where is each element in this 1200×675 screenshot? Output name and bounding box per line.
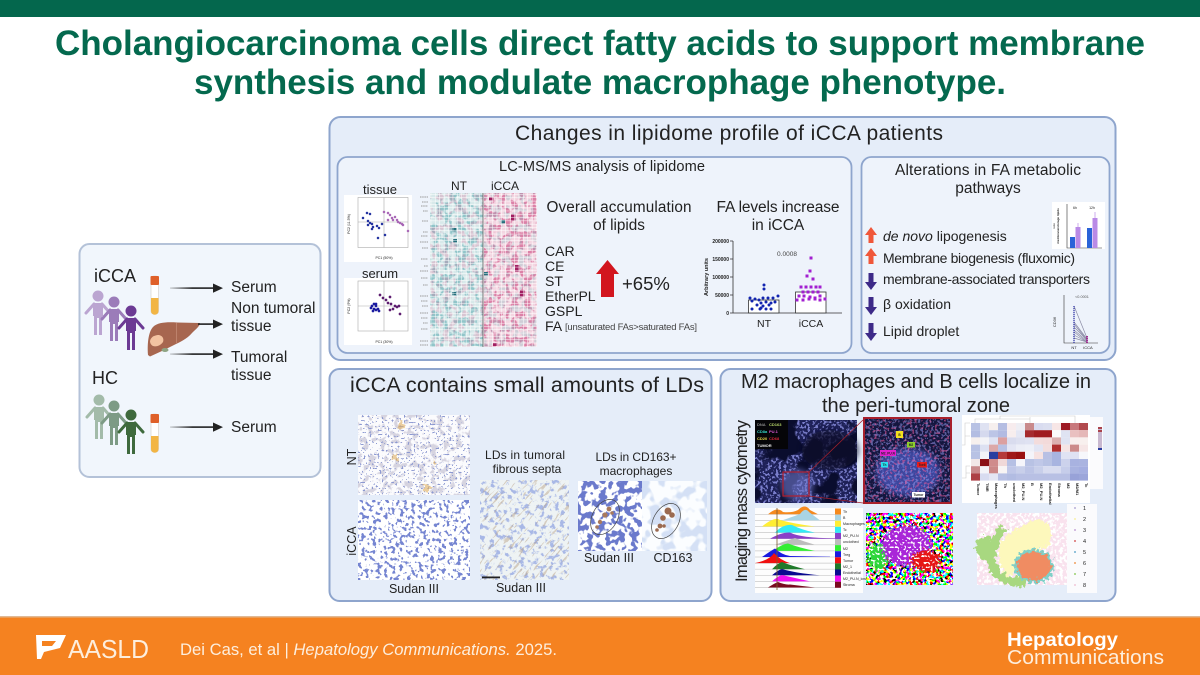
legend: ridge clusters: Tc	[843, 528, 847, 532]
text: HC serum: Serum	[231, 419, 277, 436]
cluster heatmap	[962, 415, 1103, 510]
mini bar chart: lipogenesis	[1052, 202, 1105, 249]
ridge plot	[755, 506, 866, 593]
caption: Sudan III macrophages: Sudan III	[584, 551, 634, 565]
mini bar chart: lipogenesis: 12h	[1089, 206, 1095, 210]
text: lipid droplet: Lipid droplet	[883, 323, 959, 339]
zoom box	[783, 472, 809, 496]
legend: IMC markers	[755, 420, 788, 449]
title	[55, 24, 1145, 102]
arrow: to serum	[170, 284, 223, 293]
legend: IMC markers: DNA	[757, 422, 766, 427]
cluster heatmap: Tc	[1084, 483, 1089, 488]
heading: Changes in lipidome profile of iCCA patients	[515, 122, 943, 145]
label: iCCA: iCCA	[345, 526, 359, 556]
legend: IMC markers: CD8a	[757, 429, 768, 434]
legend: ridge clusters: M2_PU.N_low	[843, 577, 866, 581]
legend: ridge clusters: B	[843, 516, 846, 520]
micrograph: fibrous septa	[480, 480, 569, 580]
caption: LDs in CD163+ macrophages: LDs in CD163+	[596, 450, 676, 464]
caption: Sudan III septa: Sudan III	[496, 581, 546, 595]
IMC image: zoomed region: Tcell	[918, 463, 926, 467]
legend: ridge clusters	[835, 508, 866, 588]
legend: ridge clusters: M2_PU.N	[843, 534, 859, 538]
IMC image: zoomed region: B	[898, 433, 901, 437]
legend: IMC markers: PU.1	[769, 429, 779, 434]
legend: neighbourhood numbers: 2	[1083, 517, 1086, 523]
legend: neighbourhood numbers: 4	[1083, 539, 1086, 545]
legend: neighbourhood numbers: 8	[1083, 583, 1086, 589]
legend: ridge clusters: M2_1	[843, 565, 852, 569]
legend: neighbourhood numbers: 1	[1083, 506, 1086, 512]
list: lipid classes: FA	[545, 318, 563, 334]
PCA plot: tissue: PC2 (11.5%)	[347, 214, 351, 234]
PCA plot: serum: PC1 (30%)	[375, 340, 393, 344]
lipid heatmap	[420, 179, 537, 347]
legend: ridge clusters: unclothed	[843, 540, 859, 544]
bar chart: FA levels: 0	[726, 311, 729, 317]
text: serum: Serum	[231, 279, 277, 296]
text: tumoral tissue: Tumoral	[231, 349, 287, 366]
text: tissue title: tissue	[363, 182, 397, 197]
legend: ridge clusters: Stroma	[843, 583, 855, 587]
cluster heatmap: B	[1030, 483, 1035, 486]
IMC image: zoomed region: M2	[909, 443, 913, 447]
caption: LDs in CD163+ macrophages	[596, 450, 676, 478]
text: beta oxidation: β oxidation	[883, 296, 951, 312]
HC label: HC	[92, 368, 118, 388]
micrograph: NT Sudan III	[358, 415, 470, 495]
legend: ridge clusters: Macrophages	[843, 522, 865, 526]
icon: iCCA patients	[86, 290, 143, 350]
panel: alterations in FA metabolic pathways	[862, 157, 1110, 353]
panel: changes in lipidome profile	[330, 117, 1116, 360]
panel: M2 macrophages and B cells	[720, 369, 1116, 601]
list: lipid classes: CAR	[545, 243, 575, 259]
top bar	[0, 0, 1200, 17]
mini slope chart: CD36: <0.0001	[1075, 295, 1089, 299]
text: tumoral tissue	[231, 349, 287, 384]
PCA plot: tissue	[344, 195, 412, 262]
panel: iCCA contains small amounts of LDs	[328, 368, 712, 602]
text: FA levels increase: in iCCA	[752, 217, 805, 234]
panel: patient cohorts and samples	[80, 244, 320, 477]
cluster heatmap: TMR	[985, 483, 990, 492]
list: lipid classes: ST	[545, 273, 563, 289]
text: +65%: +65%	[622, 273, 670, 294]
list: lipid classes: CE	[545, 258, 564, 274]
arrow: up de novo lipogenesis	[865, 227, 877, 243]
list: pathway changes	[865, 227, 1090, 341]
bar chart: FA levels: 150000	[712, 257, 729, 263]
IMC image: zoomed region: Th	[883, 463, 886, 467]
mini slope chart: CD36: NT	[1071, 345, 1077, 350]
footer bar	[0, 616, 1200, 675]
legend: IMC markers: CD20	[757, 436, 768, 441]
text: non tumoral tissue	[231, 300, 315, 335]
list: lipid classes: GSPL	[545, 303, 583, 319]
legend: ridge clusters: Th	[843, 510, 847, 514]
icon: iCCA blood tube	[150, 276, 159, 315]
cluster heatmap: M2_PU.N	[1039, 483, 1044, 500]
caption: LDs in tumoral fibrous septa: LDs in tumoral	[485, 448, 565, 462]
label: NT: NT	[345, 448, 359, 465]
heading: M2 macrophages and B cells localize in	[741, 371, 1091, 393]
text: de novo lipogenesis: de novo lipogenesis	[883, 228, 1007, 244]
text: serum title: serum	[362, 266, 398, 281]
logo: Hepatology Communications: Communications	[1007, 647, 1164, 669]
heading: LC-MS/MS analysis of lipidome	[499, 159, 705, 175]
legend: IMC markers: TUMOR	[757, 443, 772, 448]
legend: ridge clusters: Treg	[843, 553, 850, 557]
logo: Hepatology Communications	[1007, 630, 1164, 669]
citation: Dei Cas, et al | Hepatology Communications. 2025.	[180, 641, 557, 659]
heading: iCCA contains small amounts of LDs	[350, 373, 704, 397]
caption: CD163: CD163	[654, 551, 692, 565]
mini bar chart: lipogenesis: membrane/storage lipids	[1056, 208, 1060, 244]
legend: IMC markers: CD68	[769, 436, 780, 441]
legend: neighbourhood numbers: 6	[1083, 561, 1086, 567]
cluster heatmap: M2/M1	[1075, 483, 1080, 496]
arrow: HC to serum	[170, 422, 223, 432]
text: non tumoral tissue: tissue	[231, 318, 272, 335]
cluster heatmap: Endothelial	[1048, 483, 1053, 505]
bar chart: FA levels: 100000	[712, 275, 729, 281]
cluster heatmap: Macrophages	[994, 483, 999, 510]
icon: HC blood tube	[150, 414, 159, 453]
list: lipid classes	[545, 243, 697, 334]
arrow: red up	[596, 260, 619, 297]
logo: AASLD: AASLD	[68, 634, 149, 664]
logo: AASLD	[36, 634, 149, 664]
iCCA label: iCCA	[94, 266, 136, 286]
lipid heatmap: NT	[451, 179, 468, 193]
bar chart: FA levels: Arbitrary units	[704, 258, 710, 296]
bar chart: FA levels: 0.0008	[777, 251, 797, 258]
icon: healthy controls	[87, 394, 143, 454]
caption: LDs in CD163+ macrophages: macrophages	[600, 464, 672, 478]
bar chart: FA levels: NT	[757, 318, 772, 330]
PCA plot: serum: PC2 (9%)	[347, 298, 351, 314]
text: non tumoral tissue: Non tumoral	[231, 300, 315, 317]
mini bar chart: lipogenesis: ratio	[1052, 223, 1056, 229]
text: overall accumulation of lipids: of lipids	[593, 217, 645, 234]
bar chart: FA levels	[704, 239, 842, 330]
list: lipid classes: [unsaturated FAs>saturated FAs]	[565, 322, 697, 333]
arrow: to non tumoral tissue	[198, 320, 223, 329]
legend: IMC markers: CD163	[769, 422, 782, 427]
label: imaging mass cytometry: Imaging mass cytometry	[732, 419, 751, 582]
cluster heatmap: Tumor	[976, 483, 981, 496]
title: synthesis and modulate macrophage phenotype.	[194, 63, 1006, 102]
panel: LC-MS/MS analysis	[338, 157, 852, 353]
legend: neighbourhood numbers: 3	[1083, 528, 1086, 534]
list: lipid classes: EtherPL	[545, 288, 596, 304]
bar chart: FA levels: iCCA	[799, 318, 823, 330]
legend: ridge clusters: M2	[843, 547, 848, 551]
logo: Hepatology Communications: Hepatology	[1007, 630, 1118, 651]
legend: neighbourhood numbers: 5	[1083, 550, 1086, 556]
text: overall accumulation of lipids	[546, 199, 692, 234]
text: FA levels increase: FA levels increase	[716, 199, 840, 216]
IMC image: zoomed region: M2_PU.N	[881, 452, 896, 456]
legend: neighbourhood numbers: 7	[1083, 572, 1086, 578]
bar chart: FA levels: 50000	[715, 293, 729, 299]
micrograph: Sudan III macrophages	[578, 481, 642, 551]
text: membrane biogenesis: Membrane biogenesis (fluxomic)	[883, 250, 1075, 266]
cluster heatmap: M2	[1066, 483, 1071, 489]
cluster heatmap: M2_PU.N	[1021, 483, 1026, 500]
heading	[895, 162, 1081, 197]
caption: Sudan III: Sudan III	[389, 582, 439, 596]
mini slope chart: CD36: CD36	[1052, 316, 1057, 327]
heading	[741, 371, 1091, 417]
lipid heatmap: iCCA	[491, 179, 519, 193]
text: transporters: membrane-associated transporters	[883, 271, 1090, 287]
PCA plot: tissue: PC1 (50%)	[375, 256, 393, 260]
spatial cluster map: neighbourhoods	[976, 504, 1097, 593]
heading: the peri-tumoral zone	[822, 395, 1010, 417]
arrow: down transporters	[865, 273, 877, 290]
micrograph: iCCA Sudan III	[358, 500, 470, 580]
mini slope chart: CD36: iCCA	[1083, 345, 1093, 350]
IMC image: zoomed region	[864, 418, 951, 503]
micrograph: CD163 macrophages	[642, 481, 707, 551]
arrow: up membrane biogenesis	[865, 248, 877, 264]
caption: LDs in tumoral fibrous septa: fibrous septa	[493, 462, 562, 476]
spatial cluster map: cell types	[866, 513, 953, 585]
mini slope chart: CD36	[1052, 295, 1098, 350]
text: overall accumulation of lipids: Overall accumulation	[546, 199, 692, 216]
PCA plot: serum	[344, 278, 412, 345]
cluster heatmap: Th	[1003, 483, 1008, 488]
legend: neighbourhood numbers	[1067, 504, 1097, 593]
legend: ridge clusters: Endothelial	[843, 571, 861, 575]
heading: pathways	[955, 180, 1021, 197]
title: Cholangiocarcinoma cells direct fatty acids to support membrane	[55, 24, 1145, 63]
text: FA levels increase	[716, 199, 840, 234]
arrow: down beta oxidation	[865, 297, 877, 315]
IMC image: zoomed region: Tumor	[914, 493, 924, 497]
arrow: down lipid droplet	[865, 323, 877, 341]
IMC image: overview	[755, 420, 863, 503]
arrow: to tumoral tissue	[170, 350, 223, 359]
cluster heatmap: Stroma	[1057, 483, 1062, 498]
legend: ridge clusters: Tumor	[843, 559, 854, 563]
heading: Alterations in FA metabolic	[895, 162, 1081, 179]
bar chart: FA levels: 200000	[712, 239, 729, 245]
caption: LDs in tumoral fibrous septa	[485, 448, 565, 476]
cluster heatmap: unclothed	[1012, 483, 1017, 503]
icon: liver	[148, 322, 200, 356]
text: tumoral tissue: tissue	[231, 367, 272, 384]
mini bar chart: lipogenesis: 6h	[1073, 206, 1077, 210]
